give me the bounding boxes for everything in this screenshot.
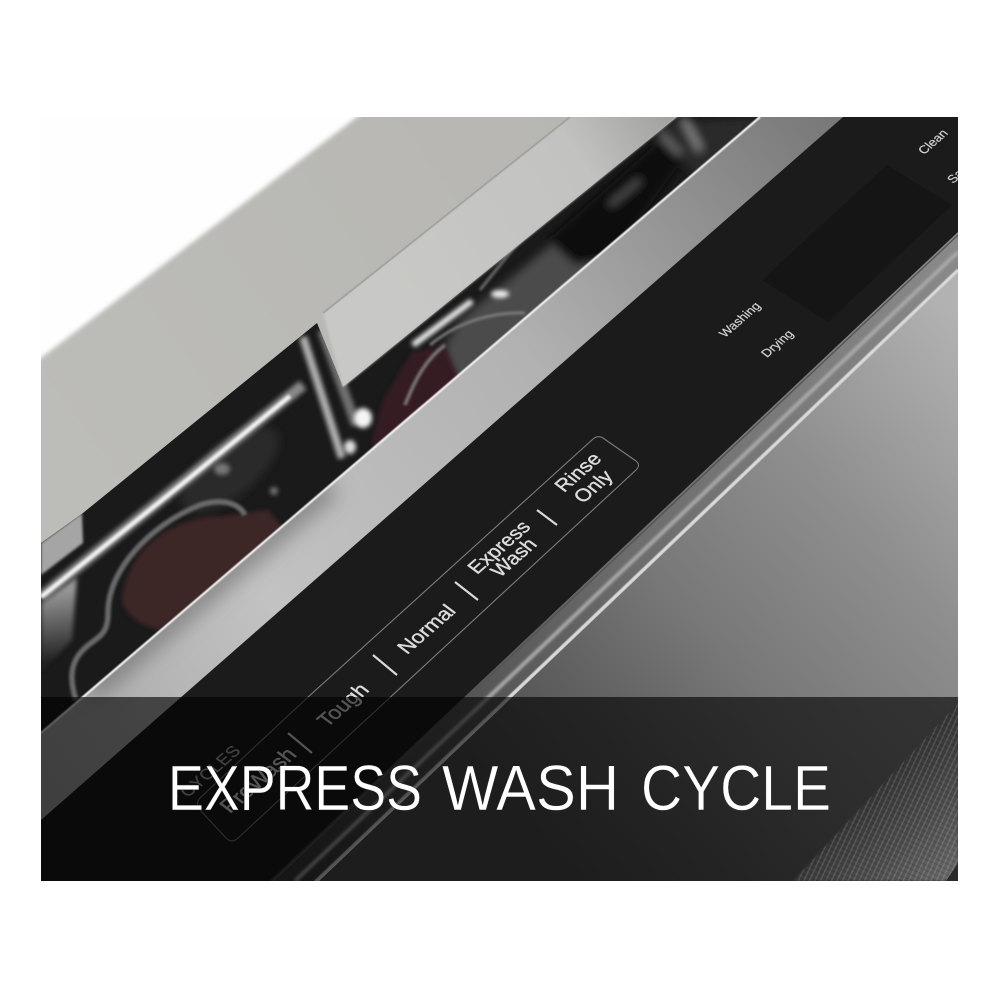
liner seam line — [323, 117, 570, 313]
title: WASH — [442, 752, 619, 824]
inner liner light band — [324, 117, 680, 388]
left grey wall — [41, 513, 83, 575]
infographic canvas — [41, 117, 958, 881]
dark rack texture — [167, 117, 760, 528]
status label: drying: Drying — [758, 328, 797, 360]
label: rinse only: Rinse — [550, 449, 607, 496]
label: prowash: ProWash — [214, 743, 302, 817]
lower trim strip — [268, 232, 958, 882]
display window — [762, 165, 952, 322]
label: normal: Normal — [393, 601, 461, 658]
rack highlights — [214, 290, 509, 495]
black control panel — [41, 117, 958, 881]
red bowl — [122, 510, 285, 630]
stainless door — [319, 273, 958, 881]
label: express wash: Wash — [486, 535, 542, 581]
status label: sanitize: Sa — [944, 167, 967, 186]
label: rinse only: Only — [569, 467, 618, 507]
label: cycles: CYCLES — [176, 742, 245, 800]
bright rack rod — [41, 385, 303, 597]
cavity interior with dish rack — [41, 117, 801, 757]
countertop white area — [41, 117, 958, 881]
title: EXPRESS — [168, 752, 422, 824]
cycle separators — [288, 510, 557, 753]
vertical rack post — [322, 330, 356, 425]
bright edge line — [41, 117, 760, 733]
status label: clean: Clean — [915, 127, 951, 157]
cycles button outline — [198, 437, 638, 841]
status label: washing: Washing — [716, 300, 764, 340]
title banner — [41, 697, 958, 881]
label: tough: Tough — [313, 680, 374, 731]
photo: dishwasher control panel — [41, 117, 958, 881]
title — [172, 765, 828, 811]
silver door band — [86, 117, 843, 697]
wire rack curve — [72, 502, 245, 700]
trim highlight lines — [273, 235, 958, 882]
silver band shading — [90, 485, 330, 690]
label: express wash: Express — [463, 517, 536, 578]
upper door frame grey band — [41, 117, 958, 706]
label: rinse only — [554, 455, 612, 502]
title: CYCLE — [641, 752, 831, 824]
mesh corner texture — [793, 703, 958, 881]
